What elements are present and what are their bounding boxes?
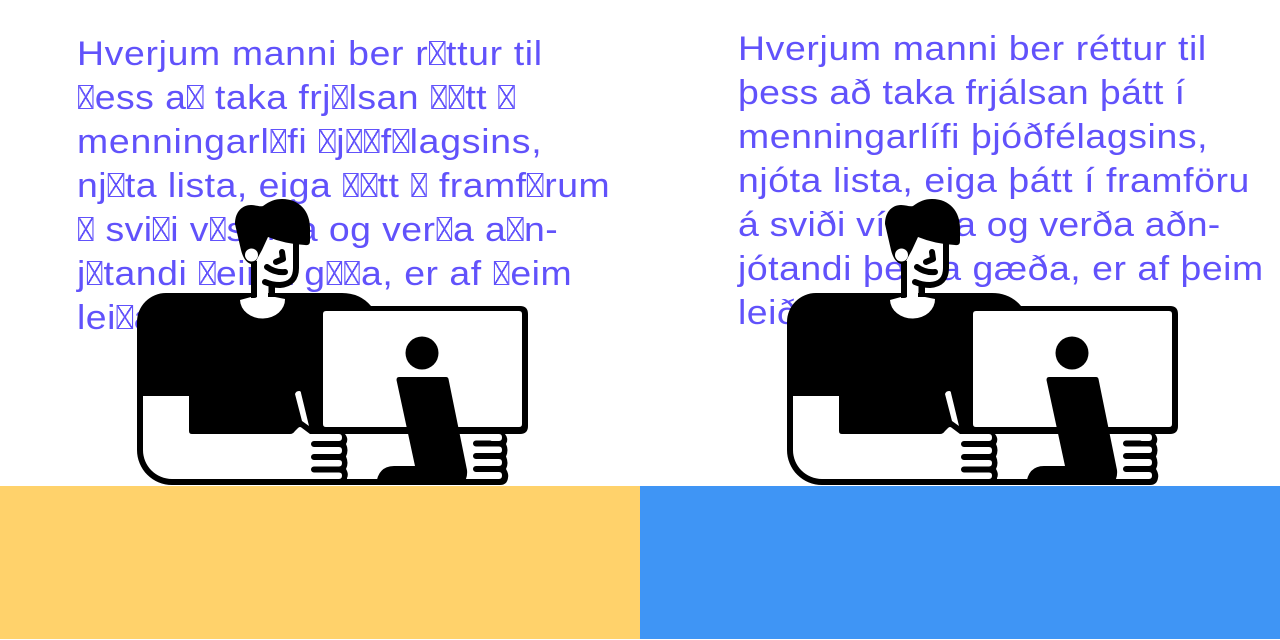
text block: left paragraph with missing glyph boxes: menningarl fi j f lagsins, (77, 123, 542, 161)
panel: yellow base band (0, 486, 640, 639)
text block: left paragraph with missing glyph boxes: ess a taka frj lsan tt (95, 79, 487, 117)
text block: left paragraph with missing glyph boxes: j tandi eirra g a, er af eim (77, 255, 572, 293)
text block: left paragraph with missing glyph boxes: svi i v sinda og ver a a n- (105, 211, 558, 249)
text block: right paragraph: jótandi þeirra gæða, er af þeim (738, 250, 1264, 288)
text block: right paragraph: menningarlífi þjóðfélagsins, (738, 118, 1208, 156)
text block: right paragraph: á sviði vísinda og verða aðn- (738, 206, 1220, 244)
illustration: person at computer, right (787, 199, 1178, 485)
text block: right paragraph (737, 30, 1264, 332)
text block: right paragraph: þess að taka frjálsan þátt í (738, 74, 1185, 112)
illustration: person at computer, left (137, 199, 528, 485)
text block: left paragraph with missing glyph boxes: nj ta lista, eiga tt framf rum (77, 167, 610, 205)
text block: right paragraph: Hverjum manni ber réttur til (738, 30, 1207, 68)
text block: right paragraph: leiða. (738, 294, 830, 332)
panel: blue base band (640, 486, 1280, 639)
text block: left paragraph with missing glyph boxes (76, 35, 610, 337)
text block: left paragraph with missing glyph boxes: lei a. (77, 299, 166, 337)
text block: left paragraph with missing glyph boxes: Hverjum manni ber r ttur til (77, 35, 543, 73)
text block: right paragraph: njóta lista, eiga þátt í framföru (738, 162, 1250, 200)
